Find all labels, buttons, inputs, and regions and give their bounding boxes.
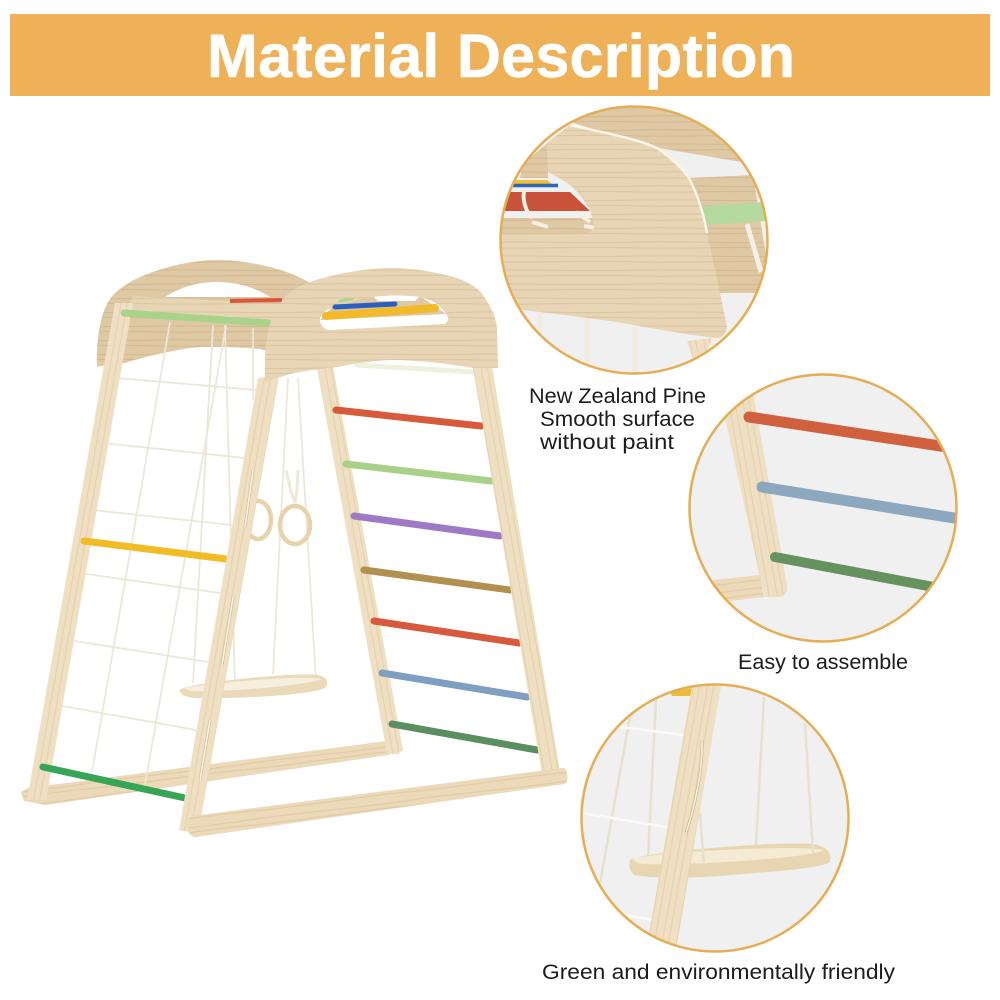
back top beam	[125, 296, 282, 322]
front bottom bar	[187, 768, 567, 837]
left dark wood	[520, 143, 548, 178]
net	[57, 322, 256, 790]
detail circle: rungs	[689, 374, 960, 642]
ropes below	[540, 312, 635, 375]
front gymnastic ring	[280, 506, 310, 544]
hole interior	[500, 180, 596, 234]
caption: wood material	[529, 385, 706, 454]
light green rod	[700, 211, 770, 216]
yellow rung sliver	[670, 688, 692, 696]
title banner	[10, 14, 990, 96]
main illustration: climbing frame	[21, 260, 567, 837]
front right leg	[473, 366, 560, 774]
swing seat	[180, 675, 327, 698]
ladder post	[725, 392, 787, 597]
white rope	[747, 224, 761, 272]
post slot	[686, 740, 702, 833]
front left leg	[179, 376, 279, 834]
back gymnastic ring	[245, 501, 271, 539]
back arch wood	[573, 108, 741, 162]
caption: wood material: Smooth surface	[540, 408, 695, 431]
green rung	[775, 557, 960, 592]
swing seat	[629, 843, 830, 878]
net lines	[582, 700, 685, 920]
right back wood	[690, 175, 772, 293]
opening interior	[320, 296, 446, 320]
back bottom bar	[21, 741, 389, 805]
left rungs	[43, 313, 268, 798]
caption: assembly: Easy to assemble	[738, 651, 908, 674]
opening rods	[326, 299, 435, 316]
ring strap	[286, 470, 298, 503]
red rung	[749, 417, 960, 449]
wood panel	[490, 125, 727, 338]
leg slots	[200, 470, 253, 780]
title banner: Material Description	[207, 22, 795, 90]
panel edge highlight	[570, 125, 707, 233]
back red rod	[230, 300, 282, 301]
wooden post	[648, 680, 722, 950]
caption: wood material: without paint	[539, 431, 674, 454]
back left post	[27, 303, 133, 800]
detail circle: swing seat	[581, 680, 849, 952]
back right post	[317, 366, 403, 754]
detail circle: wood surface	[490, 100, 772, 375]
back arch panel	[97, 260, 310, 367]
blue rung	[762, 487, 960, 519]
caption: environmental: Green and environmentally friendly	[542, 961, 896, 984]
bottom bar	[712, 575, 764, 601]
front arch panel	[265, 268, 498, 382]
post below	[687, 338, 712, 358]
right ladder rungs	[336, 365, 537, 750]
swing ropes back	[193, 325, 316, 688]
swing ropes	[700, 697, 813, 865]
caption: wood material: New Zealand Pine	[529, 385, 706, 408]
